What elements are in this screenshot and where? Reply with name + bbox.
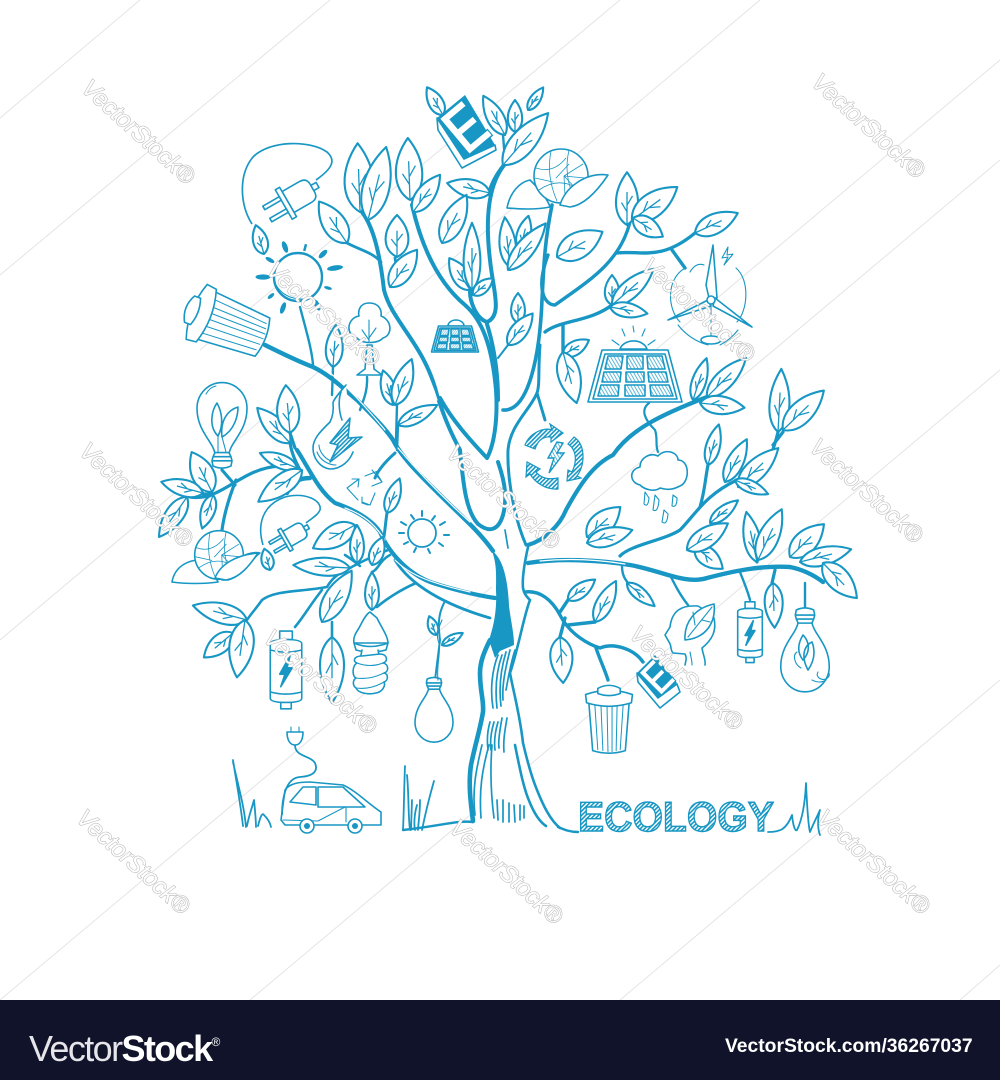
- leaves: upper left: [310, 138, 497, 431]
- title: ECOLOGY: ECOLOGY: [578, 793, 774, 840]
- leaves: upper right: [551, 172, 832, 438]
- footer url: VectorStock.com/36267037: [725, 1036, 973, 1057]
- watermarks: VectorStock®: [261, 256, 385, 372]
- footer logo: VectorStock®: [29, 1028, 219, 1069]
- icon: flame bulb with lightning: [313, 385, 362, 469]
- tree branches: [190, 115, 823, 680]
- icon: electric car with plug: [281, 727, 381, 833]
- leaves: lower right: [549, 423, 865, 684]
- trunk right edge: [510, 547, 560, 828]
- icon: battery, right: [738, 602, 762, 663]
- icon: hanging bin: [586, 685, 632, 753]
- icon: tilted bin: [175, 280, 276, 366]
- watermarks: VectorStock®: [806, 68, 930, 184]
- icon: wind turbine: [668, 245, 752, 345]
- watermarks: VectorStock®: [444, 814, 568, 930]
- icon: battery, left: [270, 631, 302, 709]
- icon: small plug with wire: [259, 495, 320, 572]
- leaves: top centre: [421, 84, 557, 350]
- watermarks: VectorStock®: [624, 620, 748, 736]
- icon: globe with leaves, top: [507, 149, 608, 209]
- icon: head with leaf: [665, 604, 715, 665]
- icon: energy block E, lower: E: [631, 651, 684, 704]
- watermarks: VectorStock®: [804, 433, 928, 549]
- branch inner highlights: [330, 320, 625, 592]
- icon: recycle circle with lightning: [525, 424, 583, 489]
- watermarks: [71, 68, 935, 930]
- icon: large bulb with leaves: [781, 608, 829, 692]
- trunk dark shading: [489, 551, 514, 658]
- icon: small tree: [349, 303, 390, 375]
- icon: rain cloud: [632, 452, 687, 523]
- icon: small sun: [399, 511, 449, 553]
- central stem joining trunk: [508, 345, 545, 545]
- watermarks: VectorStock®: [71, 804, 195, 920]
- watermarks: VectorStock®: [74, 437, 198, 553]
- watermarks: VectorStock®: [636, 252, 760, 368]
- watermarks: VectorStock®: [258, 624, 382, 740]
- icon: energy block E, top: E: [427, 87, 503, 168]
- icon: CFL bulb: [353, 612, 388, 694]
- icon: light bulb with leaves: [197, 383, 247, 468]
- grass, left: [233, 760, 434, 830]
- icon: large solar panel: [588, 326, 682, 402]
- tree trunk: [403, 530, 578, 832]
- trunk bark hatching: [474, 530, 524, 822]
- watermarks: VectorStock®: [76, 74, 200, 190]
- watermarks: VectorStock®: [441, 439, 565, 555]
- icon: large sun: [256, 240, 343, 314]
- trunk roots: [403, 822, 578, 832]
- footer bar: [0, 1000, 1000, 1080]
- icon: small solar panel: [432, 320, 478, 352]
- leaves: left side: [152, 384, 406, 703]
- watermarks: VectorStock®: [811, 804, 935, 920]
- icon: recycle triangle arrows: [347, 470, 382, 505]
- grass, right: [768, 783, 820, 835]
- icon: globe with leaves, left: [172, 531, 260, 584]
- icon: hanging plain bulb with sprout: [415, 615, 465, 742]
- trunk left edge: [470, 640, 490, 821]
- icon: plug with wire, top left: [242, 144, 332, 256]
